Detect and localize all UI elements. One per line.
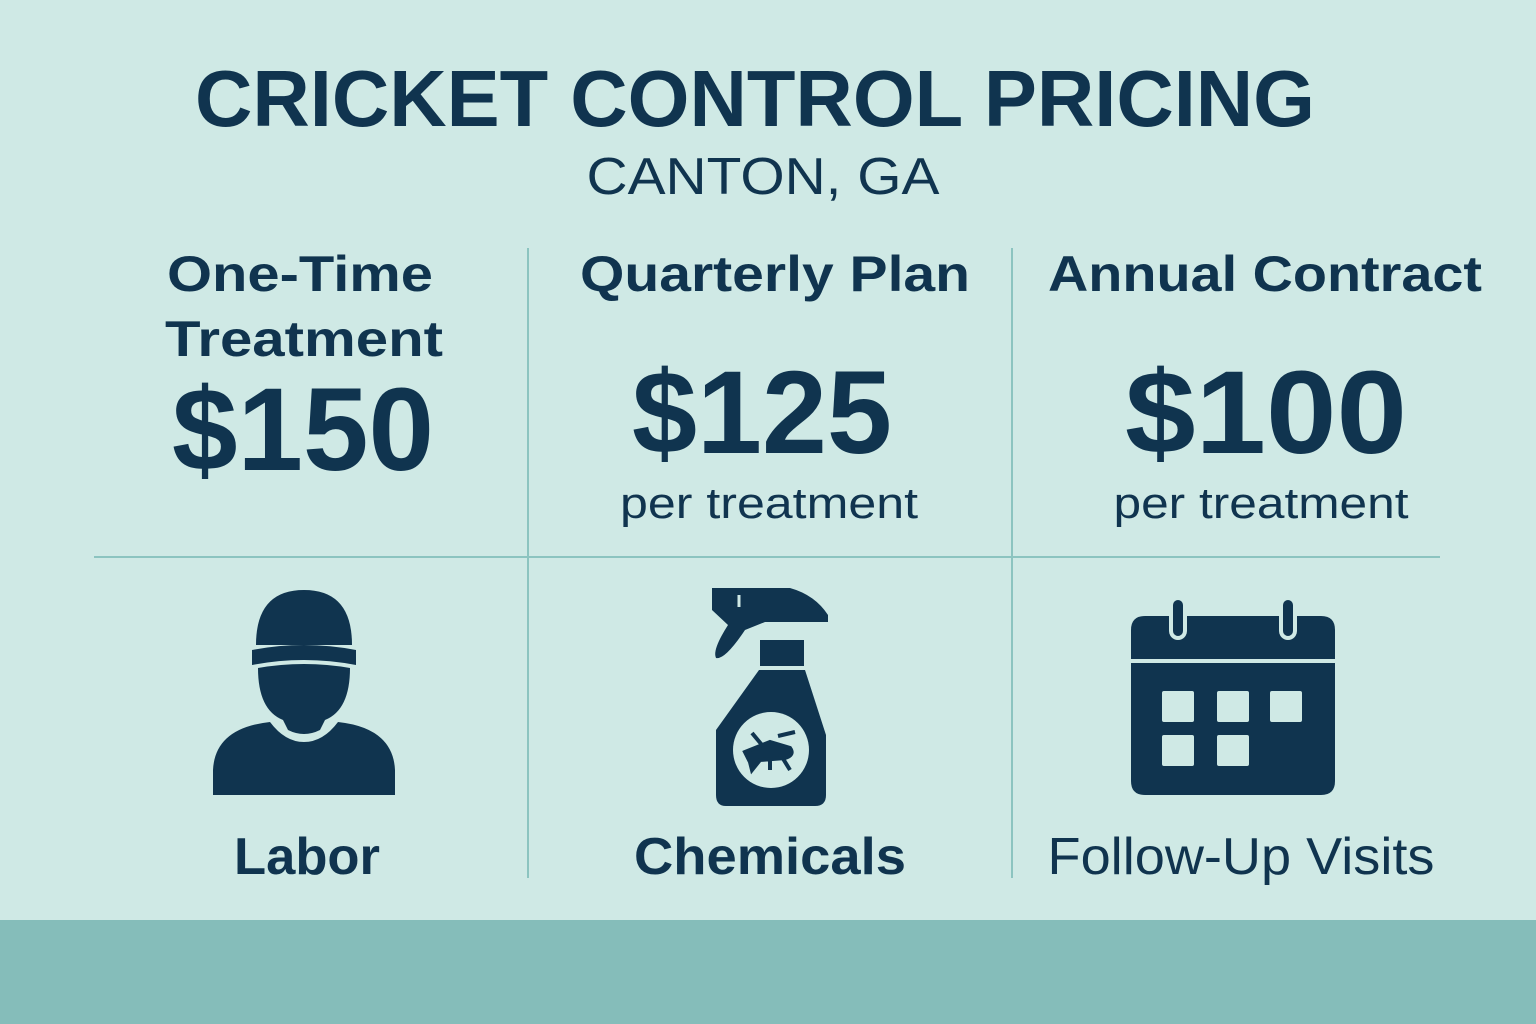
title: CRICKET CONTROL PRICING bbox=[195, 54, 1315, 143]
price 125: $125 bbox=[632, 347, 892, 479]
label: chemicals: Chemicals bbox=[634, 828, 906, 886]
label: labor: Labor bbox=[234, 828, 380, 886]
heading: annual: Annual Contract bbox=[1048, 246, 1482, 302]
heading: one-time: One-Time bbox=[167, 246, 433, 302]
panel: one-time treatment bbox=[165, 246, 443, 496]
icon: spray bottle bbox=[712, 588, 828, 806]
panel: quarterly plan bbox=[580, 246, 970, 528]
per treatment: per treatment bbox=[620, 479, 918, 528]
price 100: $100 bbox=[1125, 347, 1407, 479]
price 150: $150 bbox=[172, 364, 434, 496]
icon: calendar bbox=[1131, 598, 1335, 795]
heading: treatment: Treatment bbox=[165, 311, 443, 367]
icon: worker bbox=[213, 590, 395, 795]
panel: annual contract bbox=[1048, 246, 1482, 528]
heading: quarterly: Quarterly Plan bbox=[580, 246, 970, 302]
label: follow-up visits: Follow-Up Visits bbox=[1048, 828, 1434, 886]
subtitle: CANTON, GA bbox=[586, 148, 940, 206]
per treatment: per treatment bbox=[1114, 479, 1408, 528]
